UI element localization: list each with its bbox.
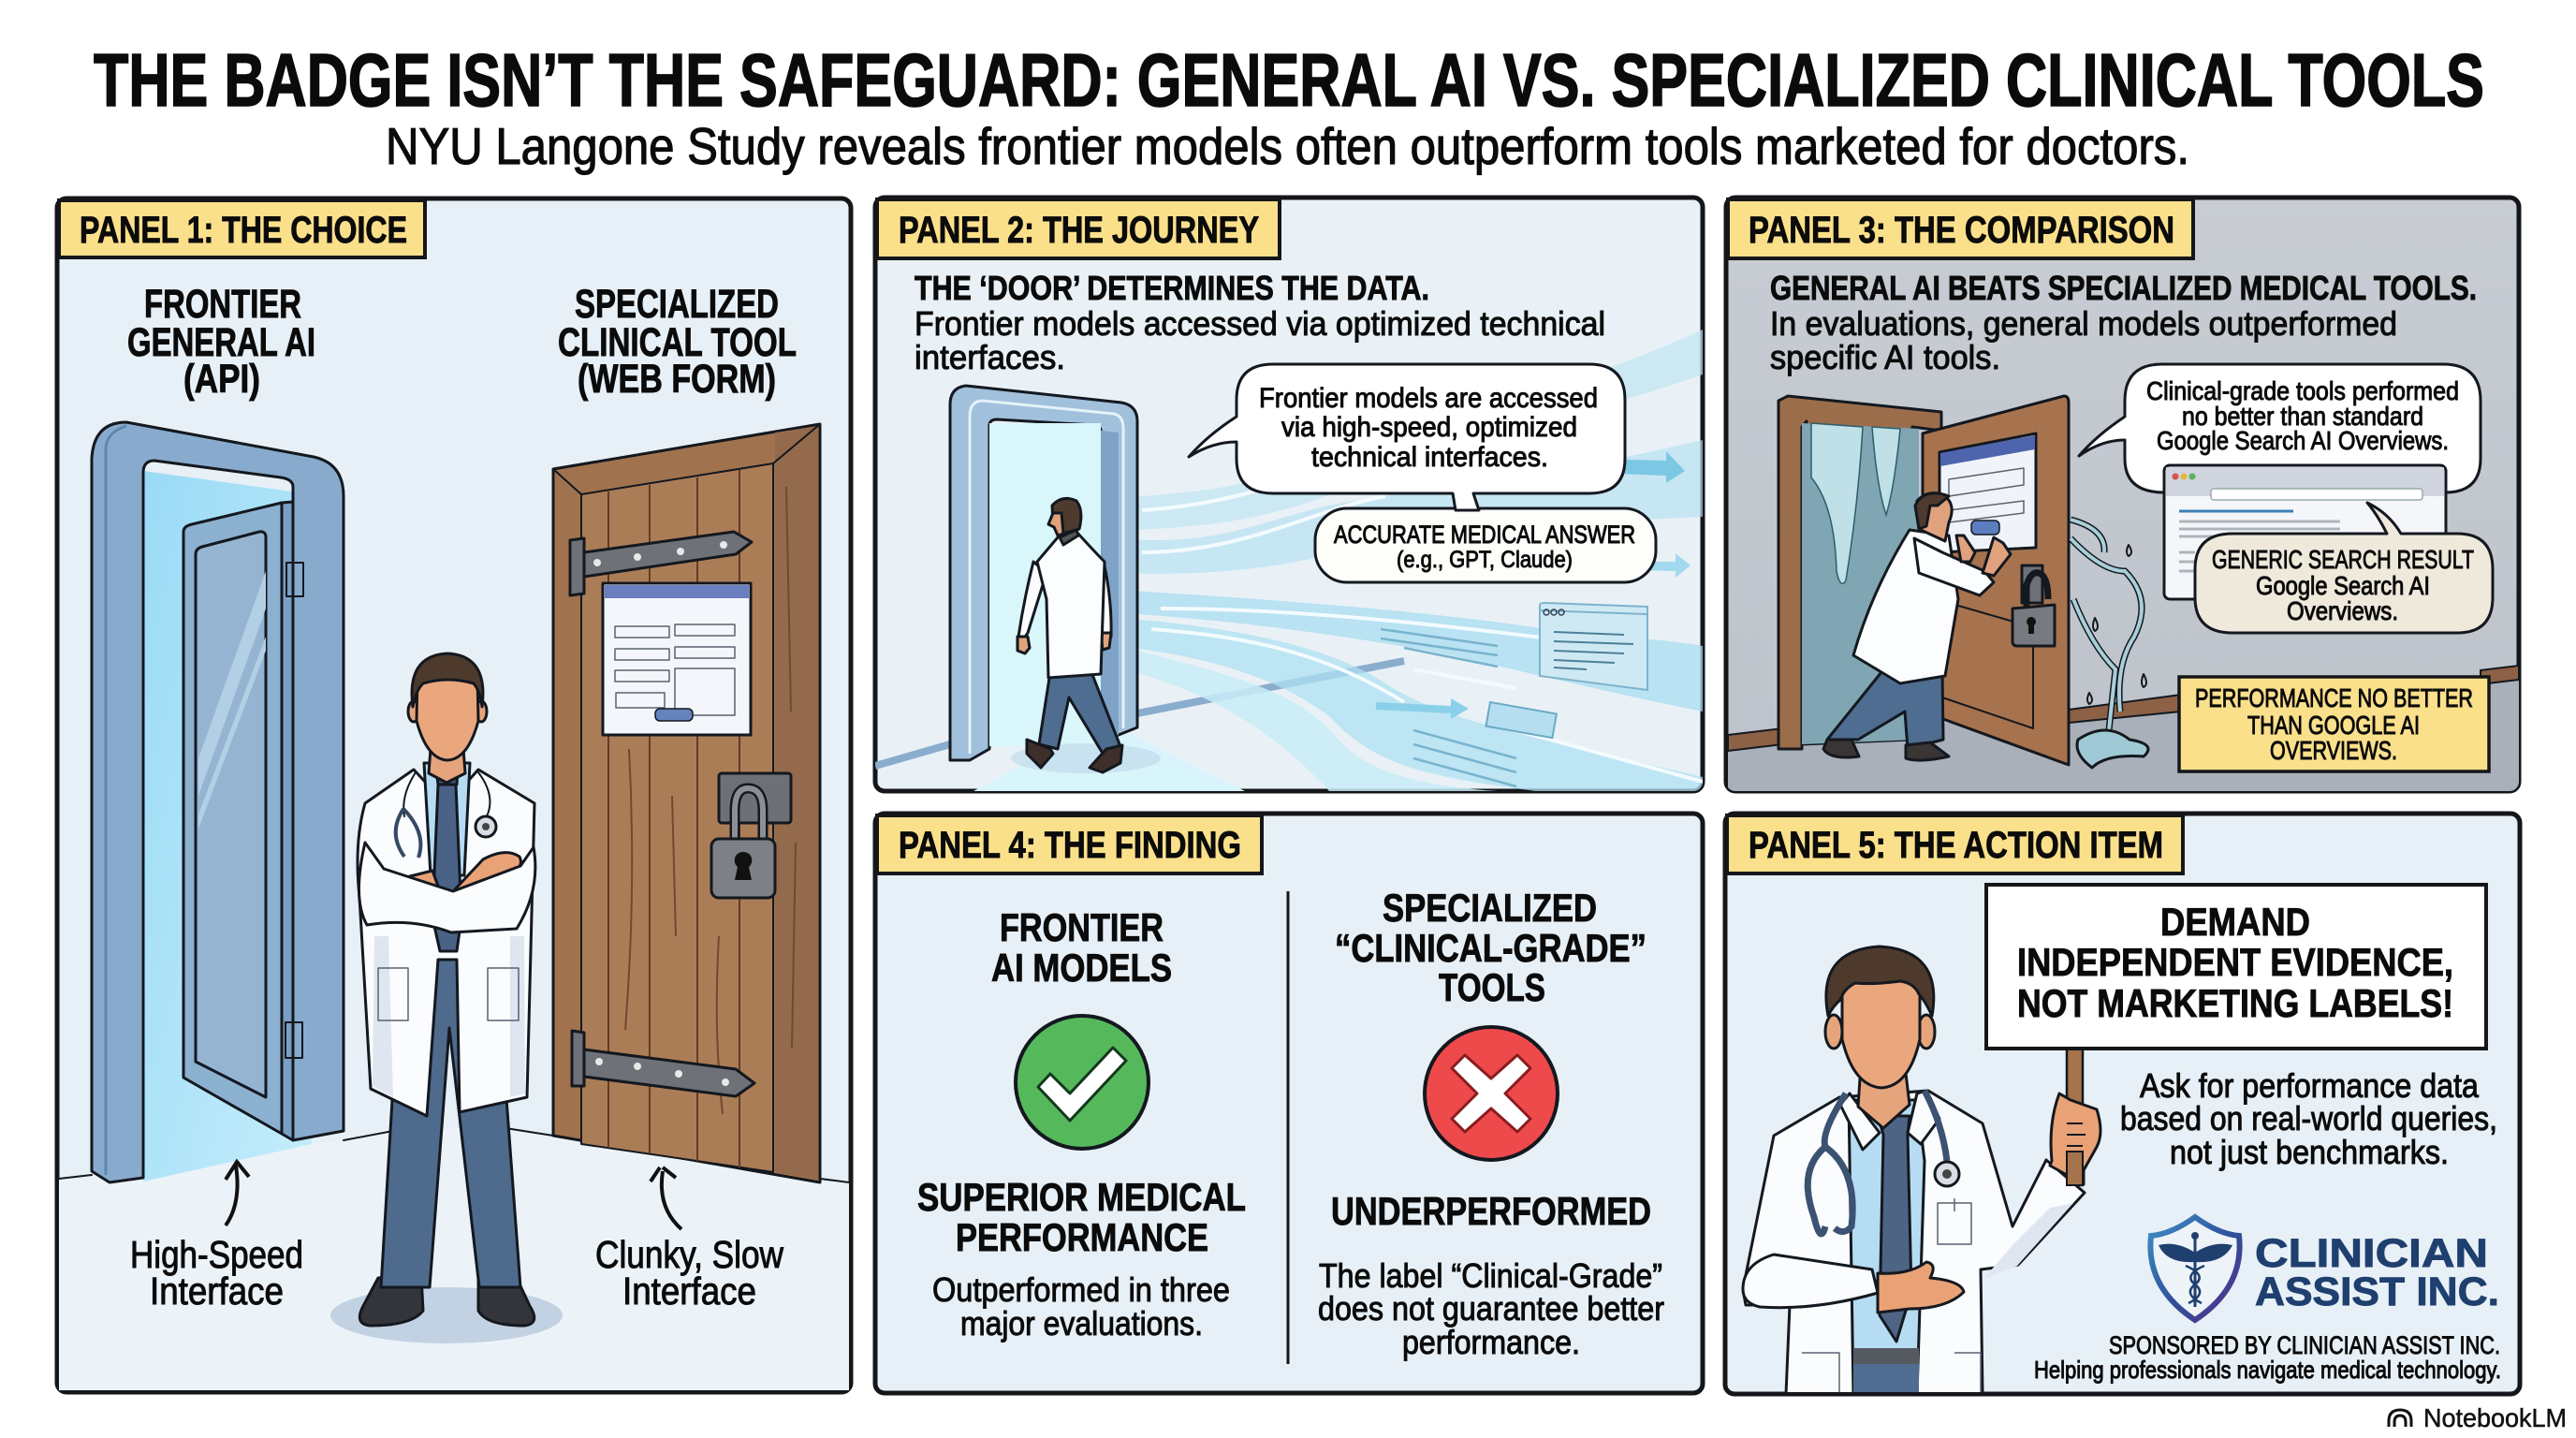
label: high-speed interface: Interface [150, 1269, 284, 1313]
panel 3 tab [1728, 199, 2193, 258]
web form [603, 583, 751, 735]
speech bubble: frontier models [1189, 364, 1625, 510]
panel 2 tab: PANEL 2: THE JOURNEY [899, 210, 1259, 251]
callout: generic search result: Google Search AI [2256, 571, 2430, 600]
padlock [711, 773, 791, 898]
column: specialized tools: “CLINICAL-GRADE” [1335, 926, 1647, 970]
heading: specialized clinical tool: CLINICAL TOOL [558, 320, 797, 365]
column: frontier AI models: AI MODELS [991, 946, 1172, 990]
heading: frontier general AI: GENERAL AI [127, 320, 315, 365]
callout: accurate medical answer [1315, 508, 1656, 582]
column: frontier AI models: major evaluations. [960, 1304, 1203, 1343]
column: specialized tools: TOOLS [1439, 965, 1545, 1009]
baseboard [1728, 666, 2519, 751]
panel 4: the finding [875, 814, 1703, 1393]
callout: generic search result: Overviews. [2287, 596, 2398, 625]
icon: doctor with crossed arms [330, 653, 563, 1343]
column: specialized tools: UNDERPERFORMED [1331, 1189, 1651, 1233]
heading: specialized clinical tool: (WEB FORM) [578, 357, 776, 402]
callout: performance no better [2179, 677, 2489, 771]
column: specialized tools: SPECIALIZED [1383, 886, 1597, 930]
callout: performance no better: THAN GOOGLE AI [2247, 711, 2420, 740]
icon: doctor holding sign [1743, 946, 2100, 1395]
sponsor note: Helping professionals navigate medical technology. [2034, 1356, 2501, 1384]
speech bubble: clinical-grade [2079, 364, 2481, 492]
text: ask for performance data [2120, 1066, 2497, 1171]
icon: wooden door ajar with form [1923, 396, 2069, 765]
logo text [2255, 1231, 2499, 1314]
heading: specialized clinical tool: SPECIALIZED [575, 282, 779, 327]
icon: NotebookLM logo [2389, 1410, 2411, 1427]
column: frontier AI models: Outperformed in three [932, 1270, 1230, 1309]
column: frontier AI models: FRONTIER [1000, 905, 1164, 949]
lower hand [1878, 1262, 1964, 1313]
panel 5: the action item [1725, 814, 2520, 1395]
window [1540, 603, 1647, 690]
divider [1286, 891, 1290, 1364]
floor line [875, 661, 1404, 766]
panel 1: the choice [57, 198, 851, 1392]
icon: red cross [1425, 1027, 1558, 1160]
text: ask for performance data: based on real-world queries, [2120, 1099, 2497, 1137]
label: high-speed interface [130, 1233, 303, 1313]
sign: NOT MARKETING LABELS! [2017, 981, 2453, 1025]
panel 4 tab: PANEL 4: THE FINDING [899, 825, 1241, 866]
sign: INDEPENDENT EVIDENCE, [2017, 940, 2453, 984]
column: specialized tools [1318, 886, 1664, 1361]
data streams [875, 330, 1703, 791]
panel 4 tab [877, 815, 1262, 873]
panel 2 text block: interfaces. [915, 338, 1065, 376]
speech bubble: frontier models: via high-speed, optimized [1281, 412, 1577, 443]
panel 2 text block [915, 269, 1605, 376]
panel 3 text block: specific AI tools. [1770, 338, 2000, 376]
callout: generic search result: GENERIC SEARCH RESULT [2212, 545, 2474, 574]
subtitle: NYU Langone Study reveals frontier models often outperform tools marketed for doctors. [386, 117, 2189, 175]
logo text: ASSIST INC. [2255, 1269, 2499, 1314]
label: clunky slow interface [595, 1233, 783, 1313]
callout: generic search result [2195, 503, 2493, 633]
text: ask for performance data: not just benchmarks. [2170, 1133, 2449, 1171]
column: frontier AI models: PERFORMANCE [956, 1215, 1208, 1259]
speech bubble: clinical-grade: Google Search AI Overviews. [2157, 426, 2449, 455]
panel 2 text block: THE ‘DOOR’ DETERMINES THE DATA. [915, 269, 1429, 307]
floor [59, 1128, 849, 1390]
speech bubble: clinical-grade: Clinical-grade tools performed [2146, 376, 2459, 405]
form [1939, 433, 2036, 552]
logo text: CLINICIAN [2255, 1231, 2488, 1276]
label: clunky slow interface: Clunky, Slow [595, 1233, 783, 1276]
panel 1 tab [59, 200, 425, 257]
speech bubble: frontier models: technical interfaces. [1311, 442, 1548, 473]
icon: glowing door frame [950, 386, 1137, 760]
icon: doctor pushing door [1823, 493, 2011, 760]
column: specialized tools: performance. [1402, 1323, 1580, 1361]
raised hand [2050, 1093, 2100, 1184]
icon: green check [1016, 1016, 1149, 1149]
column: frontier AI models: SUPERIOR MEDICAL [917, 1175, 1246, 1219]
icon: locked wooden door [553, 424, 820, 1182]
callout: performance no better: OVERVIEWS. [2270, 736, 2397, 765]
icon: clinician assist shield [2150, 1217, 2240, 1320]
sponsor note [2034, 1331, 2501, 1384]
panel 5 tab: PANEL 5: THE ACTION ITEM [1749, 825, 2163, 866]
padlock [2022, 565, 2042, 603]
panel 1 tab: PANEL 1: THE CHOICE [80, 210, 407, 251]
text: ask for performance data: Ask for performance data [2140, 1066, 2480, 1105]
floor line [59, 1128, 849, 1182]
sign: DEMAND [2160, 900, 2310, 944]
callout: accurate medical answer: (e.g., GPT, Claude) [1397, 547, 1573, 573]
hinge bottom [572, 1031, 584, 1086]
heading: frontier general AI: (API) [183, 357, 260, 402]
panel 3 text block [1770, 269, 2477, 376]
sign [1986, 885, 2486, 1185]
panel 3: the comparison [1726, 198, 2519, 791]
column: frontier AI models [917, 905, 1246, 1343]
lower sleeve [1743, 1255, 1878, 1308]
panel 2 tab [877, 199, 1280, 258]
panel 3 tab: PANEL 3: THE COMPARISON [1749, 210, 2174, 251]
panel 2: the journey [875, 198, 1703, 791]
panel 2 text block: Frontier models accessed via optimized technical [915, 304, 1605, 343]
panel 3 text block: In evaluations, general models outperformed [1770, 304, 2397, 343]
speech bubble: clinical-grade: no better than standard [2182, 402, 2423, 431]
NotebookLM wordmark: NotebookLM [2423, 1403, 2567, 1432]
column: specialized tools: The label “Clinical-Grade” [1319, 1256, 1662, 1295]
hinge top [570, 538, 584, 595]
icon: water streams [2071, 520, 2148, 768]
heading: frontier general AI [127, 282, 315, 402]
icon: doctor walking from behind [1011, 498, 1161, 773]
callout: accurate medical answer: ACCURATE MEDICAL ANSWER [1334, 521, 1635, 549]
floor [1728, 674, 2519, 791]
arrow: high-speed [226, 1162, 249, 1225]
label: high-speed interface: High-Speed [130, 1233, 303, 1276]
coat body and raised arm [1743, 1091, 2085, 1394]
label: clunky slow interface: Interface [622, 1269, 756, 1313]
column: specialized tools: does not guarantee better [1318, 1289, 1664, 1328]
speech bubble: frontier models: Frontier models are accessed [1259, 383, 1598, 414]
stream arrows [1624, 451, 1685, 483]
icon: door frame with leak [1778, 396, 1941, 749]
arrow: clunky [651, 1167, 681, 1229]
callout: performance no better: PERFORMANCE NO BETTER [2195, 683, 2473, 712]
icon: browser window [2164, 465, 2446, 599]
icon: open blue door [92, 422, 344, 1182]
panel 5 tab [1727, 815, 2183, 873]
heading: specialized clinical tool [558, 282, 797, 402]
heading: frontier general AI: FRONTIER [144, 282, 301, 327]
